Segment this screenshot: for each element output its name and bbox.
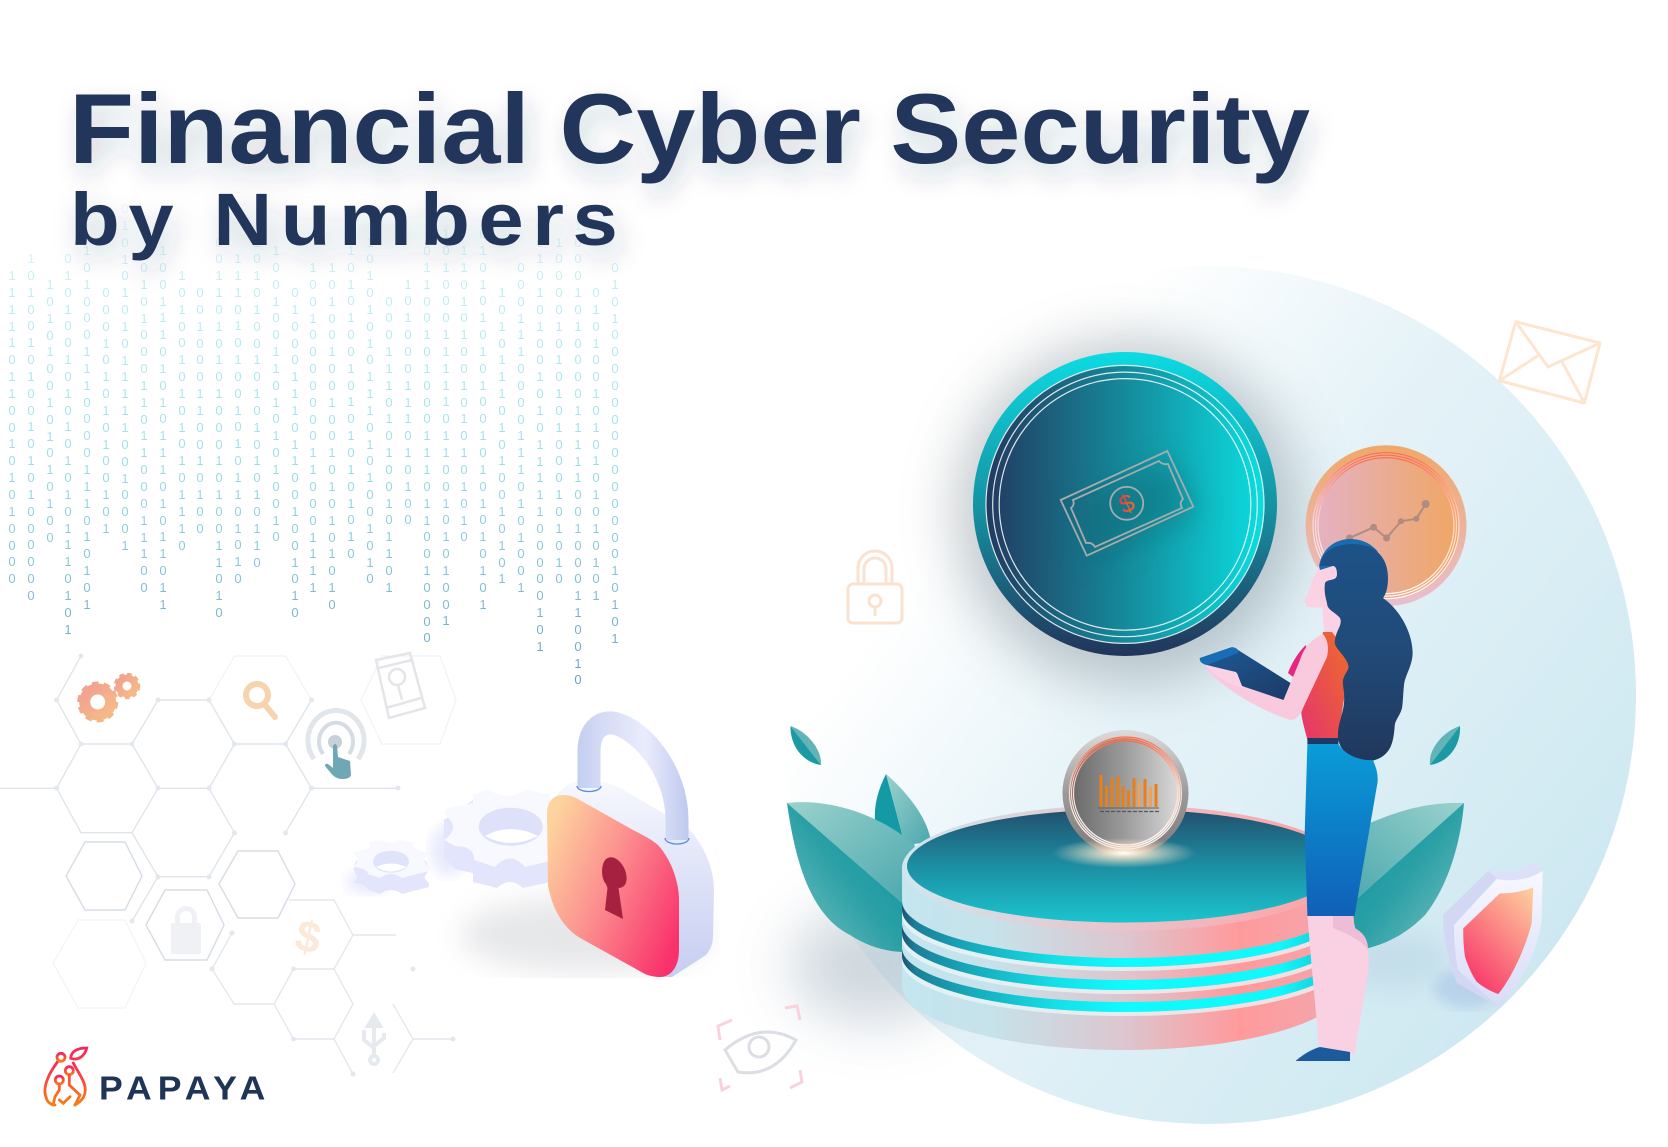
binary code rain: 101011101010010101 — [498, 285, 506, 586]
big teal coin — [973, 352, 1277, 656]
shield left side — [1443, 871, 1500, 1008]
stripe highlights — [902, 910, 1346, 1016]
small leaf right — [1430, 726, 1460, 765]
binary code rain: 1010001110000111010101 — [83, 243, 91, 612]
platform top surface — [907, 810, 1341, 922]
shoe — [1296, 1047, 1350, 1061]
big leaf right — [1350, 803, 1464, 950]
cylinder body — [902, 866, 1346, 1050]
shield shadow — [1434, 968, 1502, 1008]
background circle — [778, 266, 1636, 1124]
magenta sash — [1288, 645, 1310, 690]
binary code rain: 10100101010101110 — [178, 268, 186, 552]
icon: small lock — [171, 906, 201, 954]
small leaf left — [790, 726, 821, 765]
binary code rain: 00011100001110101001 — [517, 260, 525, 595]
big leaf back left — [875, 774, 931, 845]
padlock floor shadow — [460, 892, 644, 978]
coin rings — [1070, 737, 1182, 849]
coin body — [1062, 730, 1188, 856]
tablet — [1200, 647, 1290, 700]
icon: phone with key — [376, 653, 425, 718]
title line 1: Financial Cyber Security — [69, 73, 1310, 184]
icon: usb — [364, 1016, 384, 1064]
padlock body side — [557, 780, 714, 977]
icon: magnifier — [246, 684, 275, 717]
pants — [1305, 744, 1378, 916]
hand — [1206, 665, 1252, 692]
small 3D gear — [346, 840, 429, 894]
binary code rain: 010101010111110010001 — [121, 201, 129, 553]
coin rings — [1313, 453, 1459, 599]
binary code rain: 1000101000011111001000110010 — [574, 218, 582, 687]
logo wordmark: PAPAYA — [99, 1070, 265, 1107]
binary code rain: 1111101100101010000 — [8, 268, 16, 586]
belt — [1307, 738, 1338, 744]
binary code rain: 1001110101011101011011 — [159, 243, 167, 612]
arm — [1205, 634, 1328, 720]
logo — [45, 1048, 265, 1107]
leg — [1307, 916, 1369, 1054]
binary code rain: 101010101110101001010 — [366, 234, 374, 586]
shield front frame — [1454, 871, 1543, 1008]
logo mark — [45, 1048, 87, 1105]
banknote icon shadow — [1066, 458, 1198, 563]
dollar symbol: $ — [1115, 488, 1139, 520]
icon: faded eye — [718, 1006, 802, 1090]
big teal coin shadow — [955, 340, 1299, 684]
platform rim — [902, 805, 1346, 931]
data platform — [902, 805, 1346, 1050]
padlock — [547, 723, 714, 977]
coin rings — [986, 365, 1264, 643]
banknote icon — [1061, 451, 1193, 556]
neck — [1322, 600, 1342, 650]
shield — [1434, 863, 1543, 1008]
binary code rain: 01000111011001001010 — [291, 285, 299, 620]
face — [1304, 566, 1340, 608]
binary code rain: 011001010001110110010000 — [423, 243, 431, 645]
binary code rain: 10101001010101010110 — [253, 234, 261, 570]
binary code rain: 100001010101000101010 — [555, 234, 563, 586]
platform ground shadow — [790, 907, 960, 1023]
icon: touch hand — [308, 710, 364, 779]
shackle — [589, 723, 677, 840]
glowing stripes — [902, 901, 1346, 1012]
keyhole — [602, 857, 627, 919]
right ground shadow — [1330, 930, 1450, 990]
binary code rain: 01010010101010101110101 — [64, 251, 72, 637]
binary code rain: 1010100101010100 — [46, 277, 54, 545]
binary code rain: 11101010010101101010 — [234, 251, 242, 586]
title — [69, 73, 1310, 261]
binary code rain: 00101010010101111100000101 — [536, 218, 544, 654]
coin bars — [1100, 775, 1158, 807]
padlock face — [547, 795, 679, 977]
shackle base rings — [577, 786, 689, 844]
woman with tablet — [1200, 539, 1413, 1061]
binary code rain: 10010000000110001111 — [309, 260, 317, 595]
binary code rain: 0101001010101010101 — [592, 285, 600, 603]
hair — [1320, 544, 1413, 761]
icon: gears — [80, 674, 138, 720]
binary code rain: 101000111010100 — [404, 277, 412, 527]
shield face — [1463, 887, 1533, 994]
binary code rain: 01010001101100011100 — [140, 260, 148, 595]
binary code rain: 110101001010101010 — [460, 243, 468, 544]
orange top — [1301, 632, 1349, 742]
coin base glow — [1052, 838, 1196, 868]
binary code rain: 001000110010100 — [196, 285, 204, 536]
binary code rain: 01010000000000000010101 — [611, 260, 619, 646]
rising line chart — [1346, 500, 1430, 542]
binary code rain: 00110101010001010011010 — [215, 234, 223, 620]
binary code rain — [0, 0, 660, 700]
title line 2: by Numbers — [70, 179, 618, 261]
binary code rain: 000111010100101101 — [385, 294, 393, 595]
binary code rain: 100100110101010010 — [272, 243, 280, 544]
icon: dollar sign: $ — [291, 911, 325, 964]
big leaf left — [787, 802, 915, 952]
shield top ledge — [1488, 863, 1543, 882]
binary code rain: 101001010010101000000 — [27, 251, 35, 603]
icon: envelope — [1499, 322, 1600, 403]
binary code rain: 11010100101010101010 — [347, 226, 355, 561]
binary code rain: 01010101010010101010101 — [479, 226, 487, 612]
grey chart coin — [1052, 730, 1196, 868]
hexagon nodes — [54, 654, 455, 1076]
binary code rain: 000101010100101 — [102, 285, 110, 536]
icon: faded padlock — [848, 551, 902, 623]
binary code rain: 101001001001010101010 — [328, 260, 336, 612]
hexagon network — [0, 656, 456, 1074]
leg shade — [1333, 916, 1368, 950]
binary code rain: 101000111110110010101001 — [442, 226, 450, 628]
large 3D gear — [430, 789, 550, 888]
peach chart coin — [1306, 445, 1466, 606]
hair highlight — [1319, 539, 1378, 570]
